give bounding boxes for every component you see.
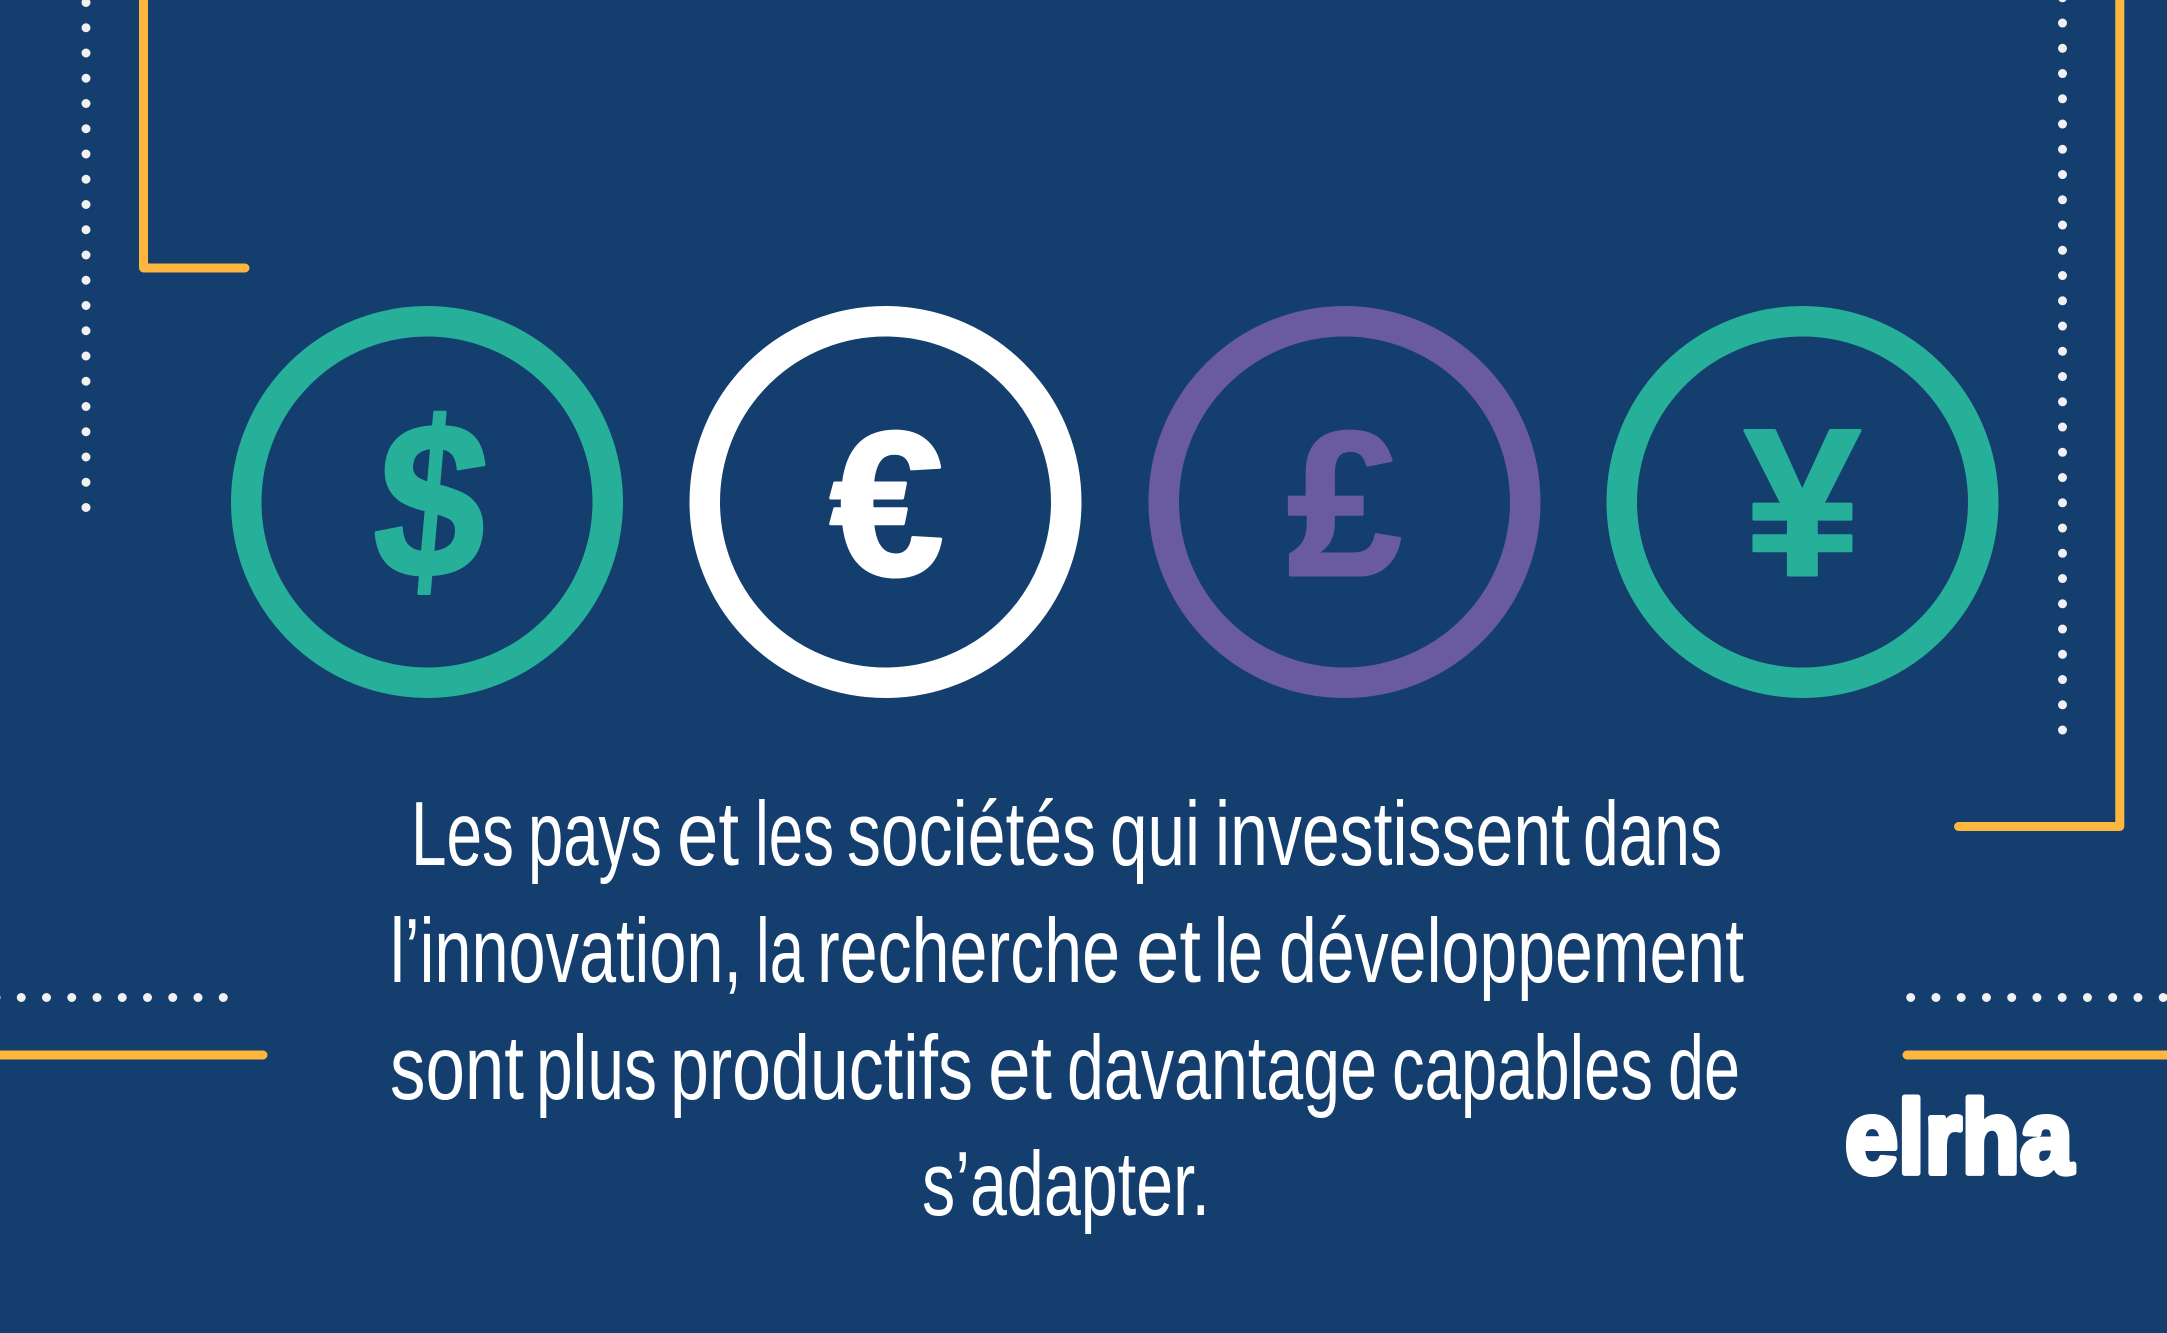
line 2: l’innovation, <box>390 901 742 1002</box>
line 1: pays <box>528 784 662 885</box>
line 1: les <box>755 784 834 885</box>
line 2: la <box>756 901 804 1002</box>
line 3: davantage <box>1067 1018 1377 1119</box>
body text <box>390 784 1744 1235</box>
line 2 <box>390 901 1744 1002</box>
top-left vertical dotted line <box>82 2 90 508</box>
right vertical dotted line <box>2058 0 2067 731</box>
bottom-right horizontal dotted line <box>1911 993 2167 1002</box>
line 3: et <box>988 1018 1052 1119</box>
line 1: et <box>677 784 739 885</box>
line 1 <box>411 784 1722 885</box>
line 2: recherche <box>817 901 1120 1002</box>
line 3: productifs <box>670 1018 973 1119</box>
icon: dollar coin: $ <box>365 376 498 624</box>
line 1: qui <box>1110 784 1200 885</box>
icon: pound coin <box>1164 321 1525 683</box>
line 3 <box>390 1018 1740 1119</box>
top-left gold corner bracket <box>144 0 245 268</box>
icon: pound coin: £ <box>1287 389 1402 619</box>
icon: euro coin <box>705 321 1066 683</box>
icon: yen coin <box>1622 321 1983 683</box>
bottom-left gold line <box>0 1050 263 1060</box>
line 4: s’adapter. <box>922 1134 1210 1235</box>
line 1: Les <box>411 784 514 885</box>
line 2: et <box>1136 901 1201 1002</box>
line 3: capables <box>1392 1018 1653 1119</box>
line 1: sociétés <box>847 784 1096 885</box>
bottom-left horizontal dotted line <box>0 993 224 1002</box>
line 3: sont <box>390 1018 524 1119</box>
icon: yen coin: ¥ <box>1744 385 1861 620</box>
line 1: investissent <box>1215 784 1570 885</box>
line 2: développement <box>1279 901 1744 1002</box>
line 3: plus <box>536 1018 657 1119</box>
icon: dollar coin <box>246 321 608 683</box>
icon: euro coin: € <box>830 389 944 619</box>
top-right gold corner bracket <box>1958 0 2120 826</box>
logo: elrha: elrha <box>1845 1080 2074 1196</box>
line 3: de <box>1668 1018 1740 1119</box>
line 2: le <box>1214 901 1263 1002</box>
line 1: dans <box>1583 784 1722 885</box>
bottom-right gold line <box>1907 1050 2167 1060</box>
